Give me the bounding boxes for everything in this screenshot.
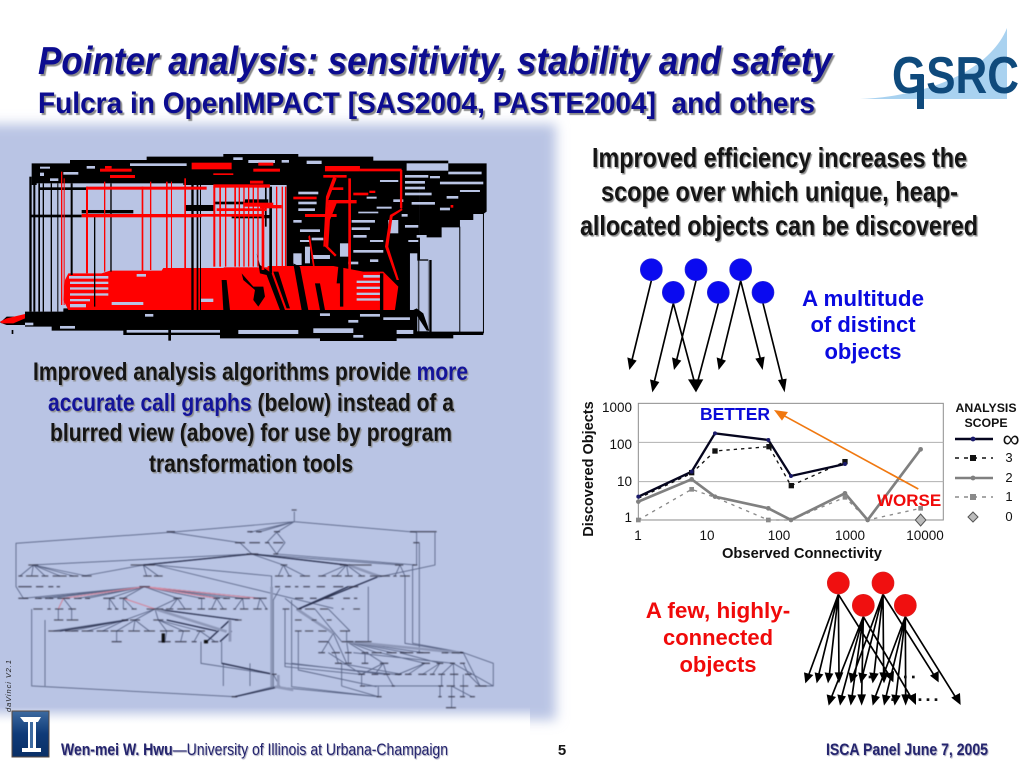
x axis labels: 10000 <box>906 528 944 543</box>
left interior gaps <box>36 190 271 207</box>
red mass <box>63 263 398 310</box>
pink edges <box>58 587 258 609</box>
dots <box>869 676 937 701</box>
x axis labels: 1000 <box>835 528 865 543</box>
line chart <box>581 400 1020 562</box>
text block: left caption: blurred view (above) for use by program <box>50 419 452 447</box>
arrows <box>632 281 783 382</box>
label: daVinci V2.1: daVinci V2.1 <box>4 660 13 712</box>
arrow: better/worse <box>774 410 918 489</box>
label: multitude of distinct objects: of distinct <box>810 312 916 337</box>
arrowheads <box>627 357 787 392</box>
y axis labels: 1 <box>624 510 632 525</box>
graph edges <box>16 512 493 708</box>
text block: right heading: scope over which unique, heap- <box>601 176 958 207</box>
y axis labels: 100 <box>609 437 632 452</box>
y axis labels: 1000 <box>602 400 632 415</box>
text block: left caption <box>33 358 468 478</box>
title: Pointer analysis: sensitivity, stability and safety <box>38 40 834 83</box>
y axis labels: 10 <box>617 474 632 489</box>
footer: author: Wen-mei W. Hwu—University of Illinois at Urbana-Champaign <box>61 741 448 759</box>
y axis labels <box>602 400 632 525</box>
legend: 1 <box>1005 489 1013 504</box>
diagram: highly connected objects <box>804 572 961 706</box>
legend: ANALYSIS <box>955 401 1017 415</box>
x axis labels: 10 <box>699 528 715 543</box>
y axis title: Discovered Objects <box>581 401 597 537</box>
x axis labels: 100 <box>768 528 790 543</box>
label: worse: WORSE <box>877 491 941 510</box>
panel: blue background <box>0 124 556 768</box>
arrows <box>809 594 957 699</box>
diagram: distinct objects <box>627 259 787 392</box>
label: better: BETTER <box>700 404 770 424</box>
red circles <box>827 572 916 616</box>
black bands and vertical lines <box>0 173 484 341</box>
icon: University of Illinois logo <box>12 711 49 757</box>
label: multitude of distinct objects: A multitude <box>802 286 924 311</box>
x axis labels: 1 <box>634 528 642 543</box>
text block: left caption: accurate call graphs (below) instead of a <box>48 389 455 417</box>
graph nodes <box>18 510 487 708</box>
chart: accurate call graph (bottom) <box>16 510 493 708</box>
plot frame and grid <box>638 403 943 520</box>
arrowheads <box>804 671 961 706</box>
footer: event: ISCA Panel June 7, 2005 <box>826 741 988 759</box>
legend: ∞ <box>1002 426 1020 453</box>
label: few highly-connected objects: objects <box>679 652 757 677</box>
legend <box>955 401 1020 524</box>
blue circles <box>640 259 774 303</box>
thick dark edges <box>60 554 463 697</box>
red lines <box>0 163 453 323</box>
subtitle: Fulcra in OpenIMPACT [SAS2004, PASTE2004] and others <box>38 87 815 120</box>
label: few highly-connected objects <box>646 598 790 677</box>
label: multitude of distinct objects: objects <box>824 339 902 364</box>
x axis labels <box>634 528 944 543</box>
series <box>636 431 926 526</box>
label: few highly-connected objects: A few, highly- <box>646 598 790 623</box>
legend: SCOPE <box>964 416 1008 430</box>
legend: 0 <box>1005 509 1013 524</box>
label: multitude of distinct objects <box>802 286 924 364</box>
logo: GSRC <box>860 28 1019 109</box>
text block: left caption: Improved analysis algorithms provide more <box>33 358 468 386</box>
x axis title: Observed Connectivity <box>722 546 883 562</box>
legend: 3 <box>1005 450 1013 465</box>
text block: left caption: transformation tools <box>149 450 353 478</box>
footer: page number: 5 <box>558 742 566 759</box>
text block: right heading <box>580 142 978 241</box>
label: few highly-connected objects: connected <box>663 625 773 650</box>
legend: 2 <box>1005 470 1013 485</box>
chart: blurred call graph (top) <box>0 154 487 341</box>
